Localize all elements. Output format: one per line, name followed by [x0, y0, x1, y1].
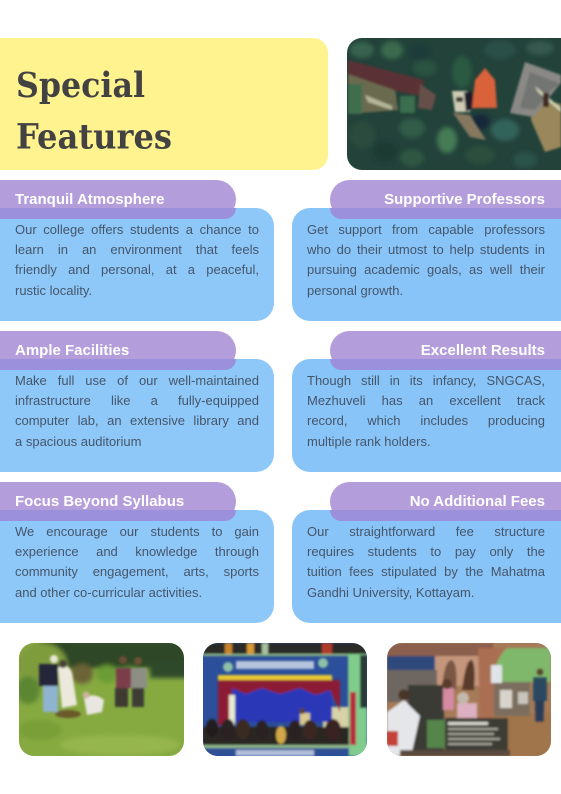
heading pill: [330, 180, 561, 219]
body text: [15, 373, 259, 449]
photo: aerial view of campus: [347, 38, 561, 170]
heading: Tranquil Atmosphere: [15, 191, 164, 208]
photo: stage event with banner: [203, 643, 367, 756]
body text: [15, 222, 259, 298]
body text: [307, 373, 545, 449]
body text: who do their utmost to help students in: [307, 242, 545, 257]
panel: No Additional Fees: [292, 482, 561, 623]
body text: pursuing academic goals, as well their: [307, 262, 545, 277]
body text: rustic locality.: [15, 283, 92, 298]
title: Special Features: Features: [16, 116, 172, 158]
body text: We encourage our students to gain: [15, 524, 259, 539]
body text: infrastructure like a fully-equipped: [15, 393, 259, 408]
title panel: [0, 38, 328, 170]
panel: Supportive Professors: [292, 180, 561, 321]
title: Special Features: Special: [16, 65, 145, 106]
panel background: [292, 208, 561, 321]
body text: computer lab, an extensive library and: [15, 413, 259, 428]
body text: and other co-curricular activities.: [15, 585, 202, 600]
heading: Ample Facilities: [15, 342, 129, 359]
heading: Supportive Professors: [384, 191, 545, 208]
body text: [307, 222, 545, 298]
heading pill: [330, 482, 561, 521]
body text: Our college offers students a chance to: [15, 222, 259, 237]
body text: Mezhuveli has an excellent track: [307, 393, 545, 408]
body text: a spacious auditorium: [15, 434, 141, 449]
body text: requires students to pay only the: [307, 544, 545, 559]
body text: Though still in its infancy, SNGCAS,: [307, 373, 545, 388]
panel background: [292, 359, 561, 472]
body text: tuition fees stipulated by the Mahatma: [307, 564, 545, 579]
pill overlap: [330, 359, 561, 370]
heading pill: [330, 331, 561, 370]
body text: record, which includes producing: [307, 413, 545, 428]
body text: Our straightforward fee structure: [307, 524, 545, 539]
body text: Gandhi University, Kottayam.: [307, 585, 474, 600]
body text: Get support from capable professors: [307, 222, 545, 237]
body text: [307, 524, 545, 600]
title: Special Features: [16, 65, 172, 158]
panel background: [0, 208, 274, 321]
body text: experience and knowledge through: [15, 544, 259, 559]
pill overlap: [0, 359, 236, 370]
pill overlap: [0, 510, 236, 521]
body text: multiple rank holders.: [307, 434, 431, 449]
body text: Make full use of our well-maintained: [15, 373, 259, 388]
panel background: [0, 359, 274, 472]
heading: Excellent Results: [421, 342, 545, 359]
panel background: [0, 510, 274, 623]
body text: learn in an environment that feels: [15, 242, 259, 257]
panel: Ample Facilities: [0, 331, 274, 472]
body text: friendly and personal, at a peaceful,: [15, 262, 259, 277]
pill overlap: [0, 208, 236, 219]
body text: [15, 524, 259, 600]
heading pill: [0, 482, 236, 521]
photo: group planting in a green field: [19, 643, 184, 756]
pill overlap: [330, 510, 561, 521]
heading pill: [0, 331, 236, 370]
panel: Focus Beyond Syllabus: [0, 482, 274, 623]
panel: Excellent Results: [292, 331, 561, 472]
heading: No Additional Fees: [410, 493, 545, 510]
panel background: [292, 510, 561, 623]
heading: Focus Beyond Syllabus: [15, 493, 184, 510]
body text: personal growth.: [307, 283, 403, 298]
panel: Tranquil Atmosphere: [0, 180, 274, 321]
photo: people at long dining tables: [387, 643, 551, 756]
pill overlap: [330, 208, 561, 219]
body text: community engagement, arts, sports: [15, 564, 259, 579]
heading pill: [0, 180, 236, 219]
